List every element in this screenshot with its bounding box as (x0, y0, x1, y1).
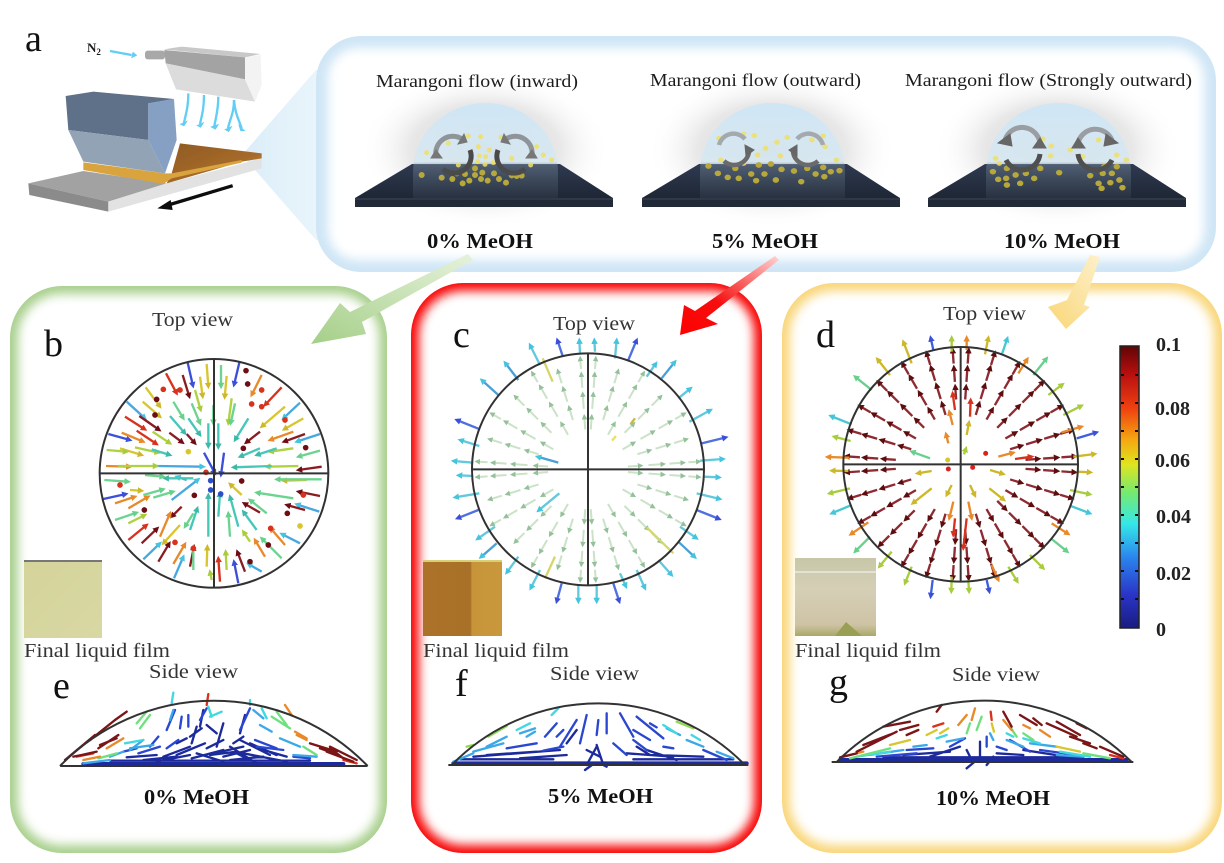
chart: top-view vector field 5% MeOH (453, 340, 726, 602)
chart: side view 10% MeOH (832, 701, 1133, 768)
flow arrows (840, 705, 1127, 768)
side view e: Side view (149, 661, 239, 683)
flow arrows (65, 693, 357, 764)
colorbar tick labels: 0 (1156, 619, 1166, 641)
flow arrows (453, 708, 747, 770)
label d: d (816, 314, 835, 356)
arrow: coating direction (157, 186, 233, 210)
top view d: Top view (943, 303, 1027, 325)
zoom cone from coater to top panel (242, 70, 340, 240)
side view g: Side view (952, 664, 1041, 686)
N2 label: 2 (96, 47, 101, 57)
particles 10% (993, 139, 1126, 188)
label: 10% MeOH bottom: 10% MeOH (936, 786, 1050, 810)
chart: top-view vector field 10% MeOH (827, 338, 1097, 597)
label: 5% MeOH top: 5% MeOH (712, 229, 818, 253)
label: 0% MeOH top: 0% MeOH (427, 229, 533, 253)
chart: side view 0% MeOH (60, 693, 368, 766)
droplet outline (448, 703, 748, 765)
heading: inward flow: Marangoni flow (inward) (376, 71, 578, 92)
top view c: Top view (553, 313, 636, 335)
icon: blade head (66, 92, 177, 173)
panel: red frame c and f (411, 283, 762, 853)
colorbar tick labels: 0.08 (1155, 398, 1190, 420)
panel: yellow frame d and g (782, 283, 1222, 853)
thumbnail: film 5% (423, 560, 502, 636)
thumbnail: film 0% (24, 560, 102, 638)
scene: 0% MeOH droplet (355, 72, 613, 228)
thumbnail: film 10% (795, 558, 876, 636)
chart: side view 5% MeOH (448, 703, 748, 770)
label e: e (53, 665, 70, 707)
heading: outward flow: Marangoni flow (outward) (650, 70, 861, 91)
circle and axes (100, 359, 328, 588)
scene: 5% MeOH droplet (642, 72, 900, 228)
icon: coated film (83, 143, 262, 184)
label f: f (455, 663, 468, 705)
caption b: Final liquid film (24, 640, 170, 662)
circulation arrows 5% (719, 134, 823, 165)
heading: strongly outward flow: Marangoni flow (Strongly outward) (905, 70, 1192, 91)
circulation arrows 10% (998, 127, 1118, 170)
droplet outline (832, 701, 1133, 762)
colorbar tick labels (1155, 334, 1191, 641)
caption c: Final liquid film (423, 640, 569, 662)
panel: Marangoni flow overview (316, 36, 1216, 272)
arrow: to red panel (680, 256, 779, 335)
circulation arrows 0% (431, 134, 537, 173)
label: 10% MeOH top: 10% MeOH (1004, 229, 1120, 253)
illustration: blade coater with nitrogen nozzle (28, 47, 262, 212)
arrow: to yellow panel (1048, 255, 1100, 329)
circle and axes (843, 347, 1078, 582)
label a: a (25, 18, 42, 60)
center dots (948, 453, 986, 469)
scene: 10% MeOH droplet (928, 72, 1186, 228)
caption d: Final liquid film (795, 640, 941, 662)
label: 5% MeOH bottom: 5% MeOH (548, 784, 653, 808)
droplet outline (60, 701, 368, 766)
side view f: Side view (550, 663, 640, 685)
particles 0% (422, 136, 552, 183)
label g: g (829, 662, 848, 704)
panel: green frame b and e (10, 286, 387, 853)
label: 0% MeOH bottom: 0% MeOH (144, 785, 249, 809)
chart: top-view vector field 0% MeOH (100, 359, 328, 588)
top view b: Top view (152, 309, 234, 331)
inward dots (120, 371, 306, 562)
inward arrows (103, 363, 322, 583)
colorbar tick labels: 0.06 (1155, 450, 1190, 472)
icon: gas nozzle (145, 47, 262, 102)
colorbar tick labels: 0.04 (1156, 506, 1191, 528)
icon: substrate stage (28, 158, 262, 212)
colorbar (1120, 334, 1191, 641)
particles 5% (708, 134, 839, 182)
circle and axes (472, 353, 704, 585)
label b: b (44, 323, 63, 365)
colorbar tick labels: 0.02 (1156, 563, 1191, 585)
outward arrows (453, 340, 726, 602)
colorbar tick labels: 0.1 (1156, 334, 1181, 356)
N2 label: N (87, 40, 96, 55)
outward arrows (827, 338, 1097, 597)
label c: c (453, 314, 470, 356)
arrow: to green panel (311, 254, 473, 344)
arrows: nitrogen flow (110, 51, 245, 132)
